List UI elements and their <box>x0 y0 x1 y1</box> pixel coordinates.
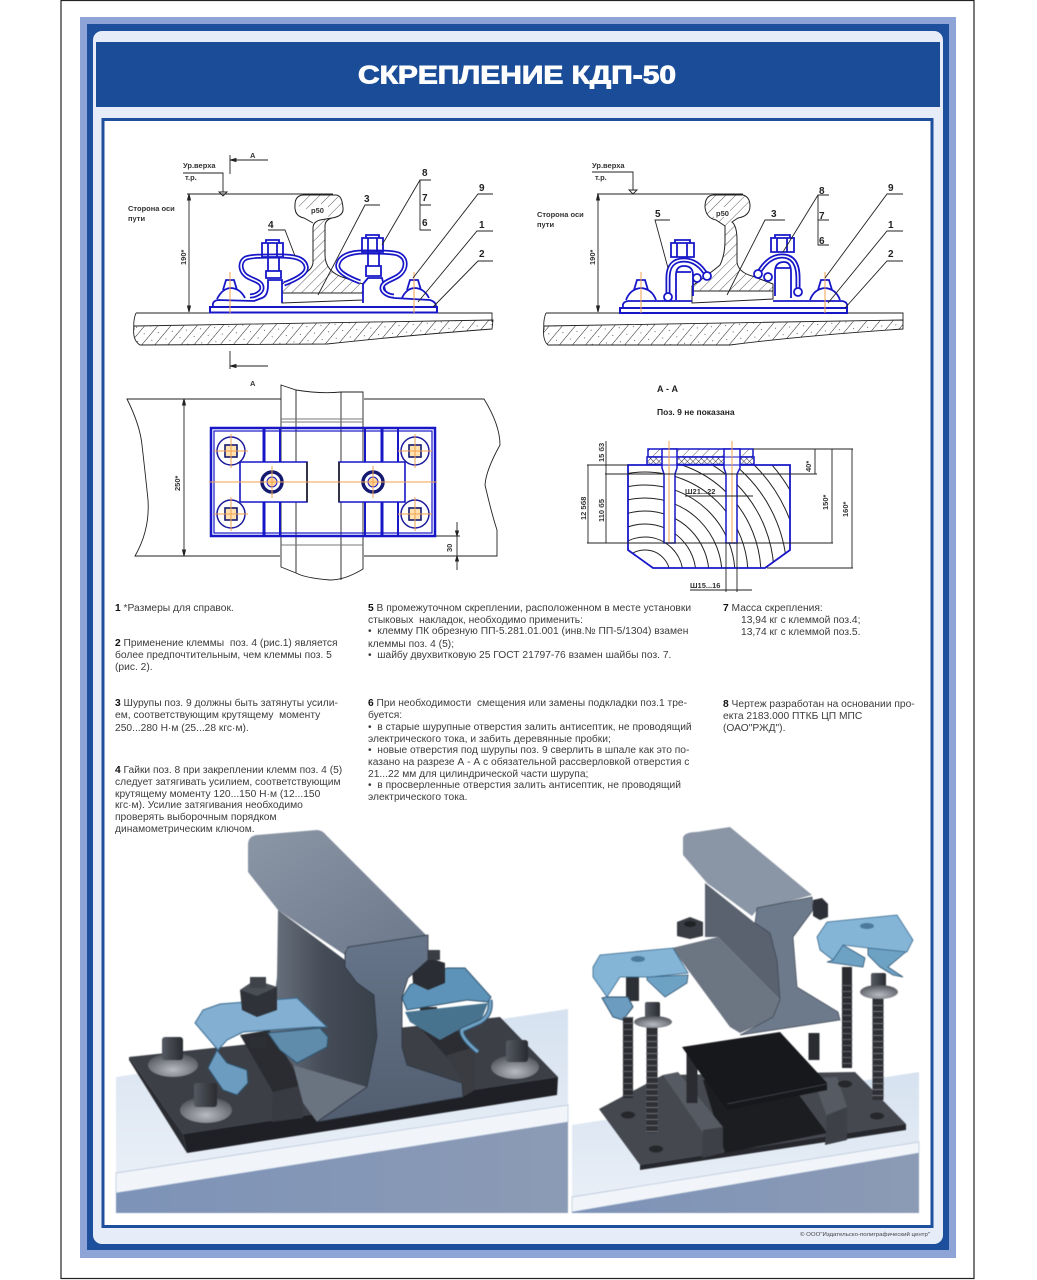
labels: пути <box>128 214 145 223</box>
note 8: (ОАО"РЖД"). <box>723 723 785 734</box>
note 2 <box>115 638 338 673</box>
labels: 110 б5 <box>597 499 606 522</box>
3D view: assembled fastening <box>116 830 568 1213</box>
note 6: 21...22 мм для цилиндрической части шурупа; <box>368 769 588 780</box>
labels: Ш21...22 <box>685 487 715 496</box>
note 1: 1 *Размеры для справок. <box>115 603 234 614</box>
note 4: динамометрическим ключом. <box>115 824 255 835</box>
note 6: 6 При необходимости смещения или замены подкладки поз.1 тре- <box>368 697 687 709</box>
labels: 6 <box>422 218 428 229</box>
note 4 <box>115 765 342 835</box>
labels: т.р. <box>185 173 197 182</box>
rail <box>672 827 840 1035</box>
labels: 7 <box>422 193 428 204</box>
back screws <box>692 1033 814 1103</box>
right bolt <box>491 1040 539 1079</box>
note 5: • клемму ПК обрезную ПП-5.281.01.001 (инв.№ ПП-5/1304) взамен <box>368 625 688 637</box>
sleeper <box>134 313 493 345</box>
labels <box>537 161 894 265</box>
labels: т.р. <box>595 173 607 182</box>
note 6: • в просверленные отверстия залить антисептик, не проводящий <box>368 780 681 791</box>
note 7: 7 Масса скрепления: <box>723 603 823 614</box>
note 8: 8 Чертеж разработан на основании про- <box>723 698 915 710</box>
labels: 3 <box>771 209 777 220</box>
rail section <box>692 195 773 303</box>
left bolts <box>148 1037 232 1123</box>
labels: 2 <box>479 249 485 260</box>
labels: 3 <box>364 194 370 205</box>
labels: 2 <box>888 249 894 260</box>
bolts and screws <box>209 434 437 531</box>
base plate <box>211 428 435 536</box>
note 5: 5 В промежуточном скреплении, расположенном в месте установки <box>368 603 691 614</box>
labels <box>128 151 485 388</box>
labels: пути <box>537 220 554 229</box>
labels: 190* <box>588 249 597 265</box>
right clip <box>817 915 913 977</box>
note 6: электрического тока. <box>368 792 467 803</box>
labels: Сторона оси <box>128 204 175 213</box>
note 6: буется: <box>368 709 402 721</box>
labels: 1 <box>479 220 485 231</box>
right clip <box>402 950 491 1052</box>
rail section: р50 <box>716 209 729 218</box>
left clip <box>195 977 328 1095</box>
note 5: • шайбу двухвитковую 25 ГОСТ 21797-76 взамен шайбы поз. 7. <box>368 649 671 661</box>
notes: column 2 <box>368 603 692 803</box>
3D view: exploded fastening <box>572 827 919 1213</box>
title: СКРЕПЛЕНИЕ КДП-50 <box>358 62 676 90</box>
note 3: ем, соответствующим крутящему моменту <box>115 710 321 721</box>
labels: 9 <box>479 183 485 194</box>
note 3 <box>115 697 338 734</box>
rail section: р50 <box>311 206 324 215</box>
sleeper outline <box>127 399 500 556</box>
clips, plate and bolts <box>620 235 847 313</box>
labels: А <box>250 151 256 160</box>
labels: Ур.верха <box>183 161 216 170</box>
note 4: следует затягивать усилием, соответствующим <box>115 777 340 788</box>
note 5: стыковых накладок, необходимо применить: <box>368 614 583 626</box>
sleeper <box>572 1072 919 1213</box>
sleeper <box>116 1009 568 1213</box>
note 4: кгс·м). Усилие затягивания необходимо <box>115 799 303 811</box>
notes: column 1 <box>115 603 342 835</box>
note 4: 4 Гайки поз. 8 при закреплении клемм поз. 4 (5) <box>115 765 342 776</box>
note 5 <box>368 603 691 661</box>
nuts <box>677 898 828 939</box>
note 7 <box>723 603 860 638</box>
section headings <box>657 384 735 417</box>
note 8 <box>723 698 915 734</box>
section headings: Поз. 9 не показана <box>657 407 735 417</box>
note 2: (рис. 2). <box>115 662 153 673</box>
labels: Сторона оси <box>537 210 584 219</box>
note 3: 3 Шурупы поз. 9 должны быть затянуты усили- <box>115 697 338 709</box>
plates and holes <box>647 441 754 543</box>
labels <box>579 443 850 590</box>
rail plan <box>281 385 363 580</box>
rail section <box>282 195 363 303</box>
note 4: крутящему моменту 120...150 Н·м (12...150 <box>115 789 321 800</box>
note 7: 13,94 кг с клеммой поз.4; <box>741 615 860 626</box>
note 4: проверять выборочным порядком <box>115 811 277 823</box>
labels: 1 <box>888 220 894 231</box>
note 2: более предпочтительным, чем клеммы поз. 5 <box>115 649 332 661</box>
labels: 250* <box>173 475 182 491</box>
section headings: А - А <box>657 384 678 394</box>
labels <box>173 475 454 552</box>
labels: 40* <box>804 461 813 472</box>
labels: Ш15...16 <box>690 581 720 590</box>
drawing: cross section with clip 4 <box>128 151 493 388</box>
drawing: cross section with clip 5 <box>537 161 903 345</box>
dimensions <box>587 441 853 592</box>
dimensions <box>182 399 497 570</box>
right rib <box>410 1013 475 1097</box>
labels: 8 <box>422 168 428 179</box>
labels: 7 <box>819 211 825 222</box>
labels: 190* <box>179 249 188 265</box>
labels: Ур.верха <box>592 161 625 170</box>
labels: 12 5б8 <box>579 497 588 520</box>
note 6 <box>368 697 692 803</box>
labels: 150* <box>821 494 830 510</box>
sleeper <box>544 313 903 345</box>
title band <box>96 42 940 107</box>
note 2: 2 Применение клеммы поз. 4 (рис.1) является <box>115 638 338 649</box>
drawing: section A-A <box>580 386 853 592</box>
content panel <box>103 120 932 1226</box>
screws <box>628 967 898 1133</box>
labels: 160* <box>841 501 850 517</box>
notes: column 3 <box>723 603 915 734</box>
note 6: • в старые шурупные отверстия залить антисептик, не проводящий <box>368 722 692 733</box>
note 6: • новые отверстия под шурупы поз. 9 сверлить в шпале как это по- <box>368 745 689 756</box>
labels: 9 <box>888 183 894 194</box>
left rib <box>240 1030 303 1122</box>
pad <box>682 1032 827 1110</box>
labels: 8 <box>819 186 825 197</box>
leader lines <box>655 194 903 308</box>
labels: А <box>250 379 256 388</box>
copyright: © ООО"Издательско-полиграфический центр" <box>800 1231 930 1238</box>
note 7: 13,74 кг с клеммой поз.5. <box>741 627 860 638</box>
labels: 15 б3 <box>597 443 606 462</box>
note 6: электрического тока, и забить деревянные пробки; <box>368 733 611 745</box>
note 6: казано на разрезе А - А с обязательной рассверловкой отверстия с <box>368 756 689 768</box>
note 5: клеммы поз. 4 (5); <box>368 639 454 650</box>
base plate <box>129 1017 558 1153</box>
labels: 6 <box>819 236 825 247</box>
note 3: 250...280 Н·м (25...28 кгс·м). <box>115 723 249 734</box>
rail <box>248 830 463 1122</box>
labels: 30 <box>445 544 454 552</box>
note 8: екта 2183.000 ПТКБ ЦП МПС <box>723 711 863 722</box>
clips, plate and bolts <box>210 235 437 313</box>
drawing: plan view <box>127 385 500 580</box>
labels: 5 <box>655 209 661 220</box>
labels: 4 <box>268 220 274 231</box>
leader lines <box>268 180 493 307</box>
clips <box>240 462 405 502</box>
left clip <box>593 948 688 1020</box>
sleeper with wood rings <box>627 464 791 569</box>
base plate <box>599 1072 906 1170</box>
